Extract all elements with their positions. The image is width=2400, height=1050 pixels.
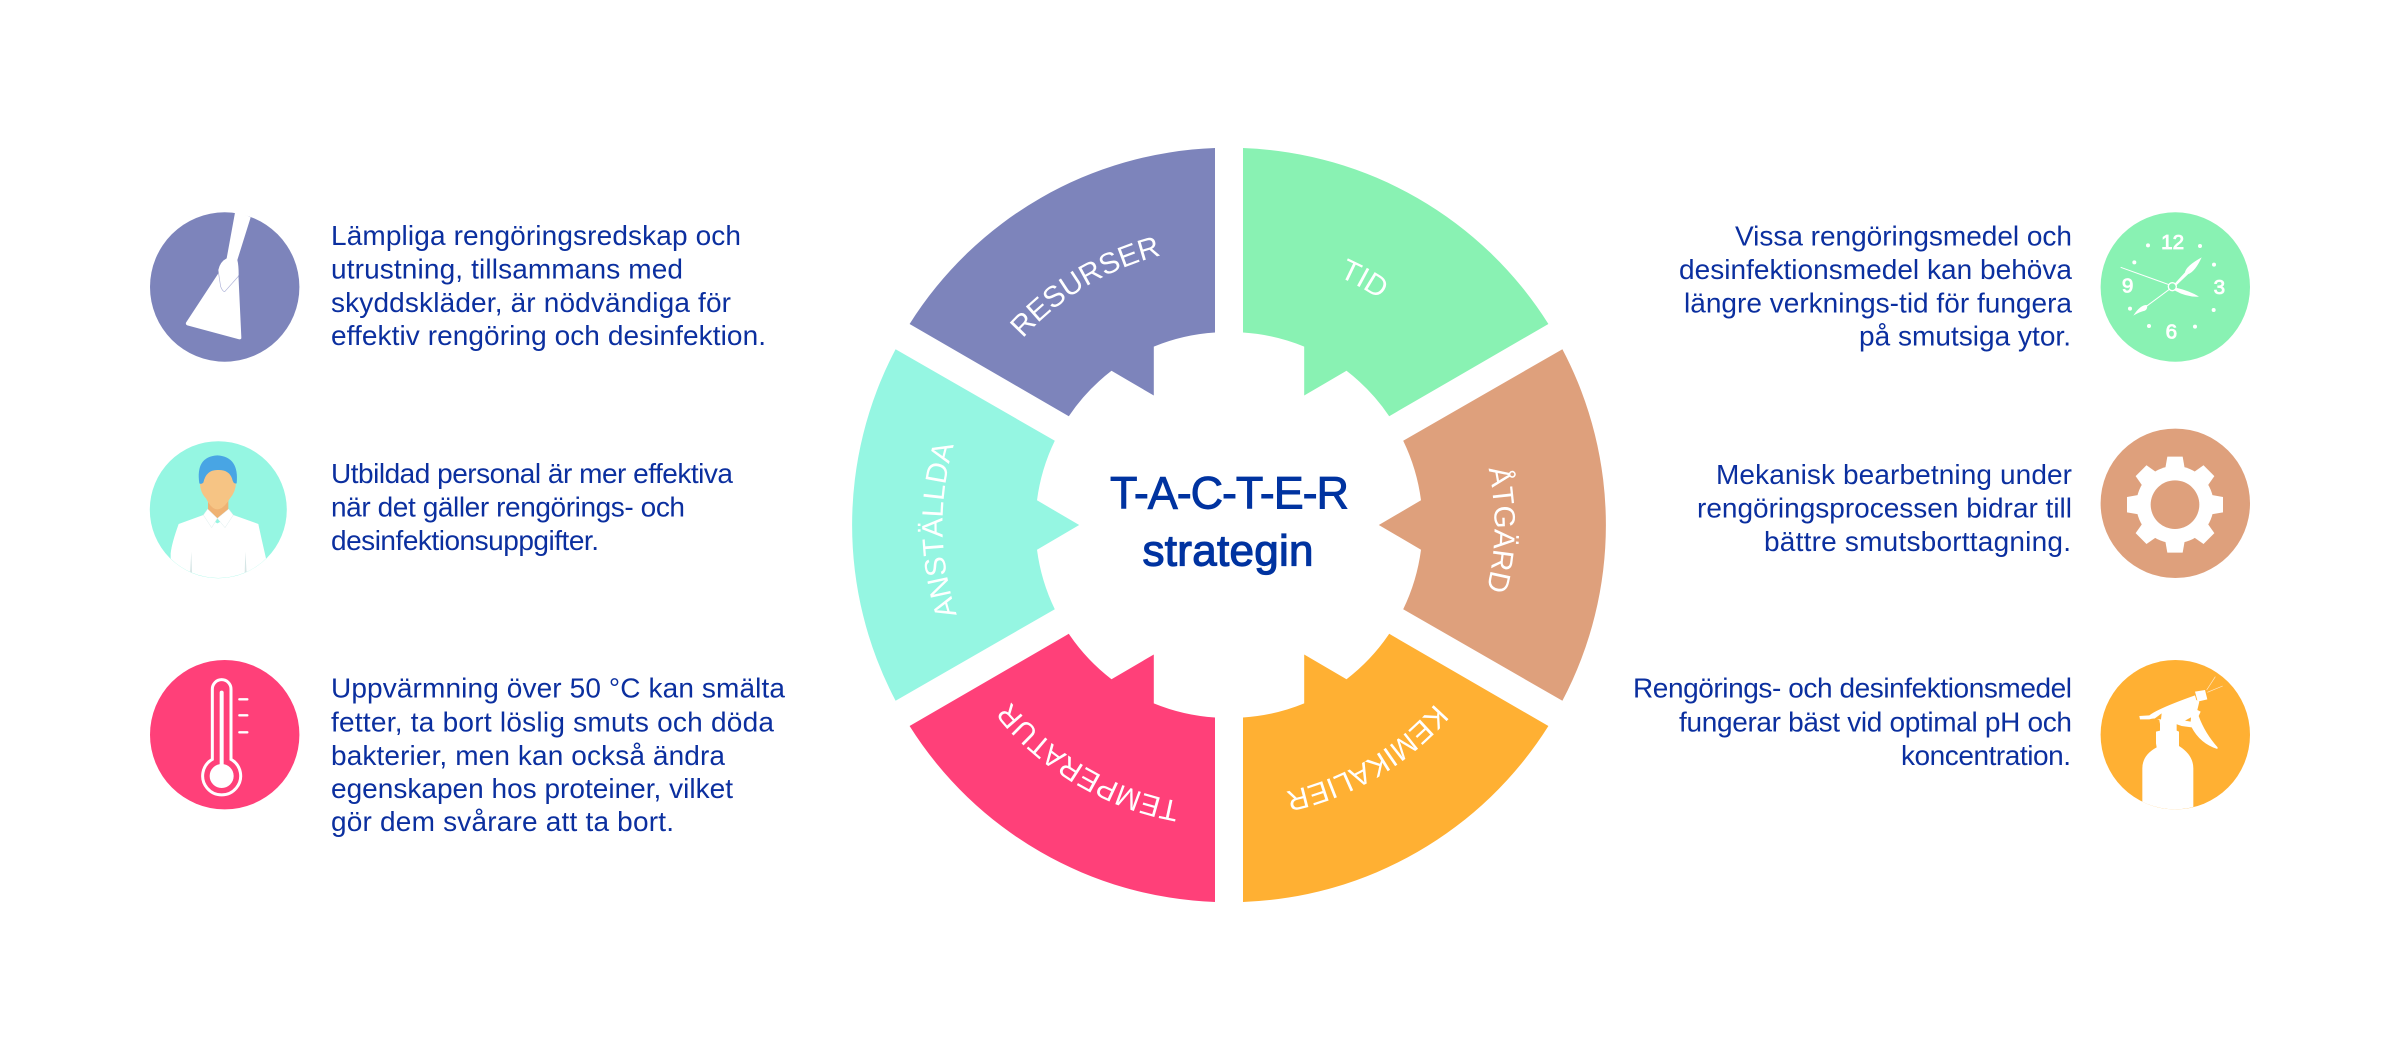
panel: temperatur item [150,660,785,837]
panel: åtgärd item [1697,429,2250,578]
text: tid: längre verknings-tid för fungera [1684,287,2072,318]
icon: clock: 6 [2166,321,2177,344]
panel: kemikalier item [1633,660,2250,813]
segment: TEMPERATUR [910,634,1215,902]
text: kemikalier [1633,673,2072,771]
icon: scraper [150,212,299,362]
segment: ANSTÄLLDA [852,349,1079,701]
icon: clock: 3 [2214,276,2225,299]
icon: person [150,441,287,590]
text: åtgärd: bättre smutsborttagning. [1764,526,2071,557]
text: tid [1679,221,2072,352]
text: åtgärd: rengöringsprocessen bidrar till [1697,493,2072,524]
panel: resurser item [150,212,766,362]
segment: ÅTGÄRD [1379,349,1606,701]
label: TID: TID [1345,258,1386,295]
segment: TID [1243,148,1548,416]
label: ANSTÄLLDA: ANSTÄLLDA [918,445,957,615]
icon: clock [2101,212,2250,362]
text: åtgärd [1697,459,2072,557]
text: resurser [331,220,766,351]
text: kemikalier: koncentration. [1901,740,2071,771]
label: ÅTGÄRD: ÅTGÄRD [1488,468,1519,592]
infographic canvas [150,148,2250,902]
icon: gear [2101,429,2250,578]
icon: spray bottle [2101,660,2250,813]
label: RESURSER: RESURSER [1010,238,1160,337]
label: KEMIKALIER: KEMIKALIER [1286,705,1448,810]
text: temperatur [331,673,785,837]
text: anställda: när det gäller rengörings- och [331,492,685,523]
icon: clock: 9 [2122,275,2133,298]
segment: RESURSER [910,148,1215,416]
title [1110,468,1349,576]
segment: KEMIKALIER [1243,634,1548,902]
text: temperatur: bakterier, men kan också ändra [331,740,725,771]
title: strategin [1142,526,1314,576]
text: resurser: skyddskläder, är nödvändiga för [331,287,731,318]
title: T-A-C-T-E-R [1110,468,1349,518]
text: anställda [331,458,733,556]
text: temperatur: Uppvärmning över 50 °C kan smälta [331,673,785,704]
text: tid: Vissa rengöringsmedel och [1735,221,2072,252]
text: åtgärd: Mekanisk bearbetning under [1716,459,2072,490]
text: temperatur: gör dem svårare att ta bort. [331,806,674,837]
text: tid: desinfektionsmedel kan behöva [1679,254,2072,285]
panel: anställda item [150,441,733,590]
label: TEMPERATUR: TEMPERATUR [998,702,1176,822]
text: temperatur: fetter, ta bort löslig smuts och döda [331,706,774,738]
text: kemikalier: Rengörings- och desinfektionsmedel [1633,673,2072,704]
icon: thermometer [150,660,299,809]
text: temperatur: egenskapen hos proteiner, vilket [331,773,733,804]
text: anställda: desinfektionsuppgifter. [331,525,599,556]
panel: tid item [1679,212,2250,362]
text: tid: på smutsiga ytor. [1859,321,2071,352]
text: kemikalier: fungerar bäst vid optimal pH och [1679,707,2072,738]
text: resurser: utrustning, tillsammans med [331,254,683,284]
text: resurser: Lämpliga rengöringsredskap och [331,220,741,251]
icon: clock: 12 [2161,231,2184,254]
text: anställda: Utbildad personal är mer effektiva [331,458,733,489]
text: resurser: effektiv rengöring och desinfektion. [331,320,766,351]
panel: strategy wheel [852,148,1606,902]
